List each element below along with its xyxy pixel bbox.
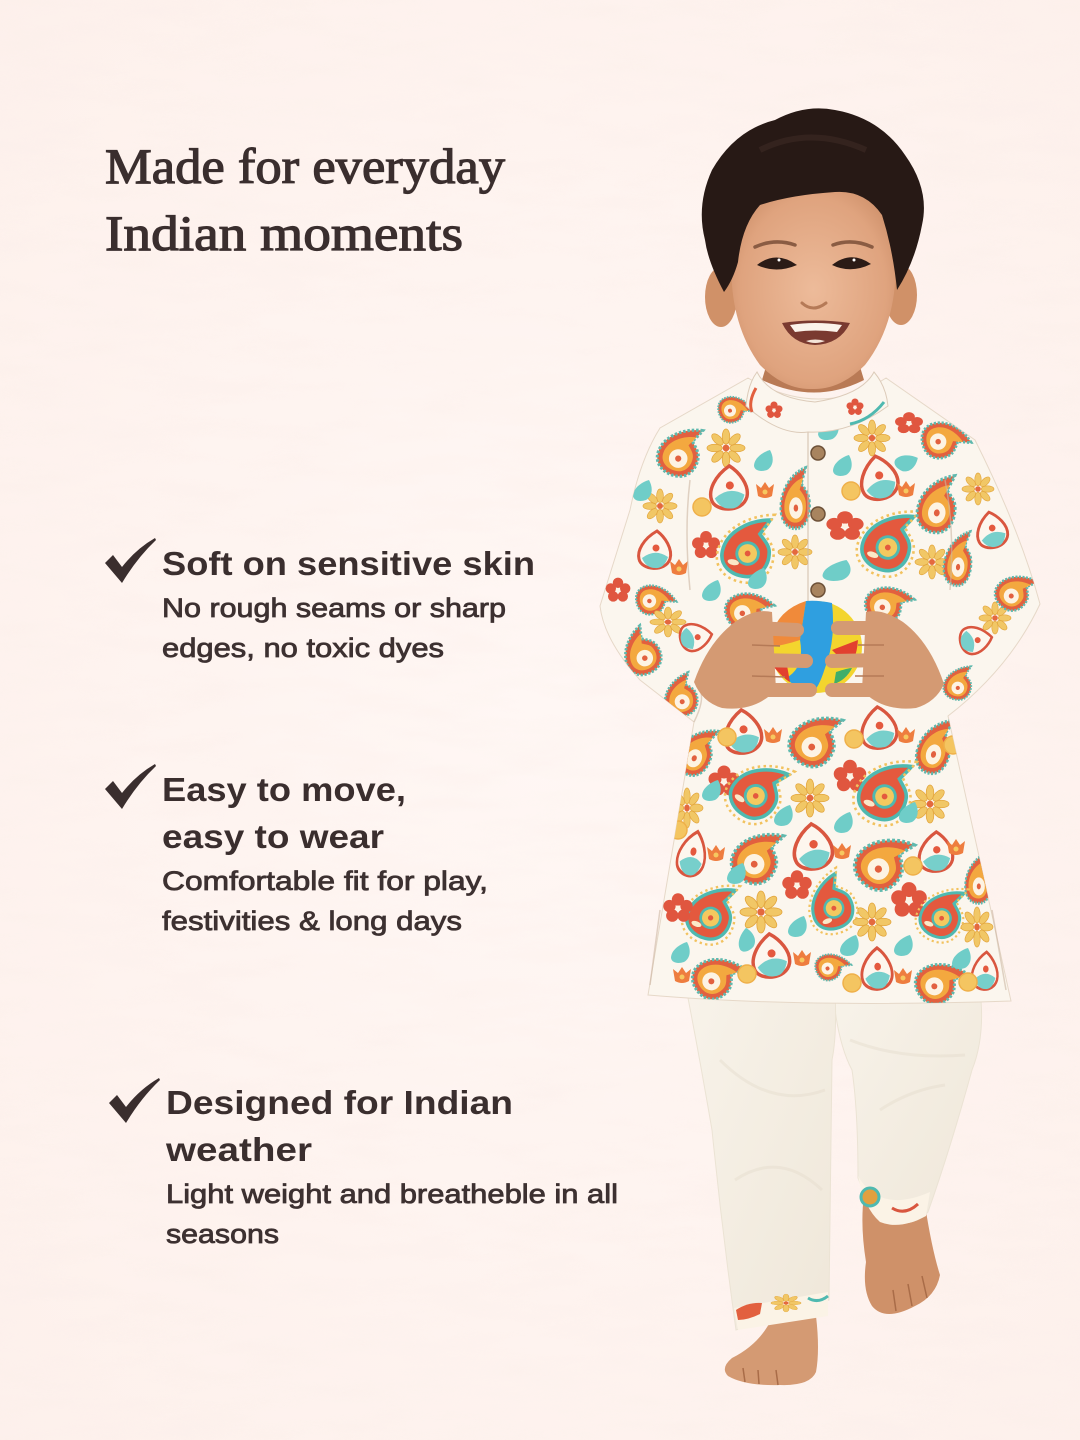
toy ball	[770, 601, 862, 693]
kurta paisley print	[606, 390, 1041, 1011]
benefit description: festivities & long days	[162, 906, 462, 936]
icon: check mark	[105, 764, 156, 809]
trouser cuffs	[734, 1176, 930, 1330]
benefit heading: easy to wear	[162, 818, 384, 855]
benefit description: seasons	[166, 1219, 279, 1249]
right foot	[862, 1195, 940, 1314]
title: Made for everyday	[105, 138, 505, 194]
benefit: designed for Indian weather	[109, 1078, 618, 1249]
hair highlight	[760, 138, 866, 150]
benefit heading: Designed for Indian	[166, 1084, 513, 1121]
benefit heading	[162, 771, 406, 855]
right trouser leg	[832, 980, 982, 1223]
benefit description: Light weight and breatheble in all	[166, 1179, 618, 1209]
benefit: easy to move	[105, 764, 488, 936]
left foot	[725, 1316, 818, 1385]
benefit description	[166, 1179, 618, 1249]
collar print	[751, 388, 884, 424]
ears	[705, 265, 917, 327]
kurta buttons	[811, 446, 825, 597]
illustration: smiling child in paisley kurta	[600, 108, 1041, 1385]
nose	[802, 303, 826, 308]
icon: check mark	[105, 538, 156, 583]
right hand	[832, 611, 944, 709]
left trouser leg	[688, 976, 836, 1330]
title: Indian moments	[105, 205, 463, 261]
smile	[782, 320, 850, 345]
kurta side slits and folds	[650, 420, 1006, 990]
benefit heading: weather	[165, 1131, 312, 1168]
benefit description	[162, 593, 506, 663]
benefit description: Comfortable fit for play,	[162, 866, 488, 896]
icon: check mark	[109, 1078, 160, 1123]
benefit description: No rough seams or sharp	[162, 593, 506, 623]
benefit description: edges, no toxic dyes	[162, 633, 444, 663]
left hand	[694, 611, 810, 709]
benefit heading: Easy to move,	[162, 771, 406, 808]
benefit: soft on sensitive skin	[105, 538, 535, 663]
benefit heading: Soft on sensitive skin	[162, 545, 535, 582]
neck	[762, 360, 864, 392]
face	[731, 182, 896, 389]
title	[105, 138, 505, 261]
kurta collar	[746, 372, 888, 432]
eyebrows	[755, 242, 872, 247]
benefit description	[162, 866, 488, 936]
eyes	[757, 257, 871, 270]
hair	[702, 108, 924, 292]
benefit heading	[165, 1084, 513, 1168]
kurta body and sleeves	[600, 378, 1040, 1003]
